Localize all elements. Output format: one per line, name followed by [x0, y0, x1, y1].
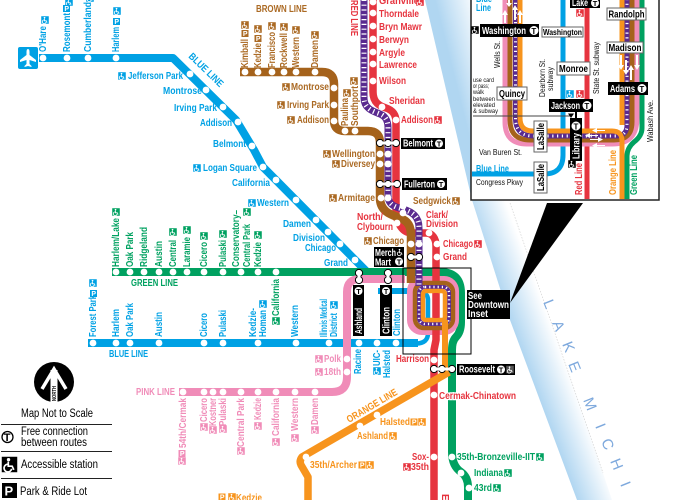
- red line labels: Grand: [443, 252, 467, 263]
- callout: see downtown inset: Inset: [468, 309, 489, 320]
- orange line labels: ORANGE LINE: [345, 387, 400, 426]
- inset: Jackson label: T: [584, 102, 589, 111]
- brown line labels: Chicago: [373, 236, 404, 247]
- red line labels: Cermak-Chinatown: [439, 391, 516, 402]
- blue line labels south: Harlem: [111, 309, 122, 337]
- blue line labels south: Halsted: [382, 350, 393, 378]
- black station label: Fullerton: T: [439, 180, 444, 189]
- red line labels: Berwyn: [379, 35, 409, 46]
- green line labels: 35th-Bronzeville-IIT: [457, 452, 535, 463]
- blue line labels north: Western: [257, 198, 289, 209]
- black station label: Fullerton: Fullerton: [404, 180, 435, 190]
- brown line labels: Diversey: [341, 159, 375, 170]
- blue line labels north: Logan Square: [203, 163, 257, 174]
- legend: park and ride: P: [4, 484, 14, 498]
- lake label: E: [564, 359, 584, 375]
- brown line labels: Kimball: [240, 39, 251, 68]
- brown line labels: Rockwell: [279, 33, 290, 68]
- inset street names: Van Buren St.: [479, 147, 522, 157]
- red line labels: Thorndale: [379, 9, 419, 20]
- inset purple ticks: [516, 0, 627, 136]
- callout: see downtown inset: Downtown: [468, 300, 509, 311]
- legend: free connection: Free connection: [21, 426, 88, 438]
- inset walking note: between: [473, 96, 495, 103]
- pink line labels: Pulaski: [218, 398, 229, 426]
- icons: pink: P: [180, 451, 185, 458]
- green line labels: GREEN LINE: [131, 278, 178, 289]
- accessibility and parking icons: blue: P: [64, 6, 69, 13]
- black station label: Merchandise Mart: Mart: [375, 258, 391, 268]
- green line labels: Central Park: [242, 224, 253, 267]
- blue line labels south: Austin: [154, 312, 165, 337]
- orange line labels: Ashland: [357, 431, 388, 442]
- blue line labels south: Western: [290, 305, 301, 337]
- inset: Library label: [570, 112, 582, 161]
- icons: pink: [178, 355, 323, 465]
- blue line labels north: Montrose: [163, 86, 202, 97]
- inset: Library label: Library: [572, 133, 582, 159]
- purple line route: [364, 0, 449, 324]
- inset: Washington black label: Washington: [482, 26, 526, 37]
- inset: LaSalle box lower: [534, 162, 547, 193]
- pink line labels: Kostner: [208, 398, 219, 426]
- inset: accessible icons Jackson: [566, 90, 584, 98]
- black station label: Roosevelt: T: [499, 366, 504, 375]
- inset line names: Red Line: [574, 163, 585, 195]
- inset: Quincy box: Quincy: [499, 89, 525, 100]
- inset: Adams label: Adams: [610, 84, 635, 95]
- pink line labels: Central Park: [236, 398, 247, 447]
- inset line names: Green Line: [629, 155, 640, 195]
- inset direction arrows: [502, 0, 640, 148]
- red line labels: RED LINE: [348, 0, 359, 36]
- green line labels: Conservatory–: [231, 210, 242, 267]
- brown line labels: Irving Park: [287, 100, 329, 111]
- black station label: Belmont: Belmont: [403, 139, 434, 150]
- red line labels: Clybourn: [357, 222, 393, 233]
- inset purple line: [516, 0, 627, 136]
- lake label: M: [579, 395, 600, 413]
- blue line labels south: District: [329, 313, 340, 337]
- green line labels: Austin: [154, 241, 165, 267]
- green line labels: Kedzie: [253, 242, 264, 267]
- red line labels: Clark/: [426, 210, 448, 221]
- red line labels: North/: [357, 212, 383, 223]
- lake label: I: [616, 479, 634, 489]
- blue line labels north: [38, 2, 348, 269]
- blue line labels north: O'Hare: [38, 26, 49, 52]
- inset red line: [584, 0, 590, 199]
- inset brown line: [510, 0, 632, 140]
- blue line labels south: BLUE LINE: [109, 349, 148, 360]
- icon: north arrow: NORTH: [52, 386, 58, 401]
- red line labels: Wilson: [379, 76, 406, 87]
- red line labels: Argyle: [379, 48, 405, 59]
- brown line labels: Southport: [350, 85, 361, 126]
- inset orange line: [520, 0, 622, 199]
- blue line labels south: Forest Park: [88, 295, 99, 337]
- stations: [40, 0, 472, 491]
- pink loop: [410, 279, 456, 332]
- inset line names: Orange Line: [608, 150, 619, 195]
- inset: walk-between arrow: [473, 114, 574, 118]
- black station label: Merchandise Mart: Merch: [375, 248, 396, 259]
- inset: Washington blue line box: Washington: [543, 27, 582, 37]
- brown line labels: Western: [291, 37, 302, 68]
- inset walking note: [472, 77, 499, 115]
- brown line labels: Wellington: [332, 149, 375, 160]
- blue line labels north: Division: [293, 233, 325, 244]
- green line labels: Laramie: [182, 237, 193, 267]
- green line labels: Central: [168, 240, 179, 267]
- brown line labels: Kedzie: [253, 43, 264, 68]
- inset: Madison box: Madison: [608, 43, 642, 54]
- blue line labels north: Harlem: [111, 27, 122, 52]
- lake label: H: [606, 456, 626, 473]
- accessibility and parking icons: blue: [41, 0, 381, 375]
- pink line route: [179, 279, 405, 392]
- pink line labels: PINK LINE: [136, 387, 175, 398]
- inset walking note: use card: [473, 77, 494, 84]
- black station label: Clinton: Clinton: [382, 307, 392, 334]
- orange line labels: 35th/Archer: [310, 460, 357, 471]
- inset: LaSalle box lower: LaSalle: [536, 164, 547, 191]
- green line labels: 43rd: [474, 483, 492, 494]
- red line labels: Division: [426, 219, 458, 230]
- blue line labels south: Illinois Medical: [319, 299, 330, 337]
- inset: Library label: T: [574, 122, 578, 132]
- icon: accessible Washington: [471, 26, 479, 34]
- green line labels: Indiana: [474, 468, 503, 479]
- blue line labels north: Damen: [283, 219, 311, 230]
- inset walking note: elevated: [473, 102, 495, 109]
- legend divider lines: [1, 424, 112, 478]
- pink line labels: Cicero: [199, 398, 210, 422]
- inset locator box: [403, 268, 471, 354]
- lake label: L: [539, 297, 558, 311]
- lake label: C: [597, 436, 617, 453]
- inset blue line: [472, 0, 563, 174]
- inset: LaSalle box upper: [534, 121, 547, 152]
- red line labels: [348, 0, 516, 500]
- orange line labels: [236, 387, 410, 500]
- inset: Jackson label: Jackson: [551, 101, 580, 112]
- legend: accessible station: [2, 457, 98, 472]
- legend: accessible station: Accessible station: [21, 459, 98, 471]
- accessibility and parking icons: blue: P: [114, 19, 119, 26]
- inset street names: [476, 41, 655, 187]
- black station label: Clinton: T: [384, 287, 389, 296]
- inset: Monroe box: Monroe: [559, 64, 588, 75]
- legend: free connection: between routes: [21, 437, 87, 449]
- inset line names: [476, 0, 640, 195]
- brown loop: [415, 283, 453, 328]
- brown line route: [240, 72, 411, 283]
- pink line labels: Damen: [310, 398, 321, 425]
- green line labels: Ridgeland: [139, 227, 150, 267]
- icon: north arrow: [34, 362, 74, 402]
- blue line labels south: Kedzie-: [248, 308, 259, 337]
- legend: park and ride: Park & Ride Lot: [20, 486, 88, 498]
- blue line labels south: Cicero: [199, 313, 210, 337]
- brown line labels: Armitage: [338, 193, 375, 204]
- callout: see downtown inset: See: [468, 291, 482, 302]
- legend: park and ride: [2, 483, 88, 498]
- blue line labels south: [88, 295, 403, 378]
- brown line labels: Francisco: [267, 32, 278, 68]
- brown line labels: Paulina: [340, 98, 351, 126]
- legend: free connection: [2, 426, 88, 449]
- icons: orange: P: [360, 462, 365, 470]
- blue line labels north: Chicago: [305, 243, 336, 254]
- red line route: [373, 0, 436, 500]
- blue line labels north: BLUE LINE: [186, 51, 225, 90]
- inset walking note: or pass;: [473, 83, 489, 90]
- red line labels: Lawrence: [379, 60, 417, 71]
- transfer connectors: [355, 139, 456, 373]
- accessibility and parking icons: blue: P: [91, 291, 96, 298]
- inset green line: [627, 0, 642, 199]
- lake label: [539, 297, 634, 489]
- black station label: Belmont: T: [437, 140, 442, 149]
- brown line labels: BROWN LINE: [256, 4, 307, 15]
- green line labels: [111, 210, 535, 494]
- blue line labels south: Clinton: [392, 309, 403, 336]
- callout: see downtown inset: [467, 203, 583, 320]
- inset street names: Wells St.: [492, 41, 502, 68]
- green line route: [112, 272, 468, 500]
- black station label: Merchandise Mart: T: [397, 258, 402, 267]
- icons: brown: P: [243, 31, 248, 38]
- pink line labels: [136, 354, 341, 448]
- red line labels: Harrison: [396, 354, 429, 365]
- red line labels: Bryn Mawr: [379, 22, 422, 33]
- icons: brown: P: [256, 36, 261, 43]
- blue line labels south: UIC-: [372, 350, 383, 366]
- blue line labels north: California: [232, 178, 270, 189]
- inset line names: Line: [476, 3, 491, 14]
- blue line labels north: Jefferson Park: [128, 71, 183, 82]
- red line labels: Sheridan: [389, 96, 425, 107]
- red inside loop: [434, 293, 438, 318]
- pink line labels: 18th: [324, 367, 341, 378]
- icons: red: [403, 0, 482, 471]
- blue line labels south: Homan: [258, 310, 269, 337]
- red line labels: Addison: [401, 115, 433, 126]
- lake label: A: [548, 318, 568, 334]
- panel: downtown inset: [471, 0, 659, 200]
- inset: Adams label: T: [639, 85, 644, 94]
- red line labels: Chicago: [443, 239, 473, 250]
- lake label: K: [558, 339, 578, 355]
- legend: free connection: T: [4, 432, 11, 444]
- inset: LaSalle box upper: LaSalle: [536, 123, 547, 150]
- inset walking note: & subway: [473, 108, 499, 115]
- blue line labels south: Oak Park: [125, 303, 136, 337]
- green line labels: Cicero: [199, 242, 210, 267]
- inset street names: Congress Pkwy: [476, 177, 524, 187]
- lake label: I: [591, 421, 609, 431]
- inset: Quincy box: [497, 87, 527, 100]
- pink line labels: Kedzie: [253, 398, 264, 420]
- blue line labels north: Addison: [200, 118, 232, 129]
- pink line labels: 54th/Cermak: [178, 398, 189, 448]
- blue line labels north: Rosemont: [62, 12, 73, 52]
- pink line labels: Western: [290, 398, 301, 431]
- icons: orange: P: [412, 420, 417, 426]
- brown line labels: Sedgwick: [413, 196, 451, 207]
- legend note: Map Not to Scale: [21, 408, 93, 420]
- inset line names: Blue Line: [476, 164, 509, 175]
- inset street names: Wabash Ave.: [645, 100, 655, 142]
- brown line labels: [240, 4, 451, 247]
- black station label: Clinton: [380, 285, 392, 336]
- inset street names: subway: [545, 66, 555, 91]
- blue line labels north: Irving Park: [174, 103, 217, 114]
- orange line route: [300, 291, 449, 500]
- green line labels: Pulaski: [218, 240, 229, 267]
- inset street names: State St. subway: [591, 41, 601, 94]
- lake shoreline: [425, 0, 612, 500]
- brown line labels: Addison: [297, 115, 329, 126]
- black station label: Roosevelt: Roosevelt: [459, 365, 496, 376]
- green line labels: Harlem/Lake: [111, 218, 122, 267]
- inset pink line: [505, 0, 637, 144]
- brown line labels: Montrose: [291, 82, 329, 93]
- blue line labels north: Belmont: [213, 139, 247, 150]
- blue line labels south: Pulaski: [218, 310, 229, 337]
- inset: Washington black label: T: [531, 27, 536, 36]
- brown line labels: Damen: [310, 40, 321, 68]
- black station label: Merchandise Mart: [374, 247, 404, 268]
- black station label: Ashland: Ashland: [354, 308, 365, 334]
- accessibility icons: green: [112, 208, 544, 492]
- orange line labels: Halsted: [380, 417, 410, 428]
- pink line labels: Polk: [324, 354, 341, 365]
- inset: Randolph box: Randolph: [608, 10, 644, 20]
- icons: brown: [241, 21, 460, 245]
- inset street names: Dearborn St.: [537, 59, 547, 97]
- blue line labels south: Racine: [353, 349, 364, 374]
- pink line labels: California: [271, 398, 282, 436]
- icon: accessible Lake: [576, 9, 584, 17]
- inset walking note: walk: [472, 89, 485, 96]
- green line labels: Oak Park: [125, 232, 136, 267]
- black station label: Ashland: T: [356, 287, 361, 296]
- icon: accessible Library: [568, 160, 576, 168]
- blue line route: [39, 58, 428, 344]
- blue line labels north: Grand: [324, 258, 348, 269]
- red line labels: 35th: [411, 462, 429, 473]
- icons: orange: [218, 418, 426, 500]
- red line labels: Sox-: [412, 452, 429, 463]
- green line labels: California: [271, 279, 282, 316]
- icon: airport: [18, 47, 38, 69]
